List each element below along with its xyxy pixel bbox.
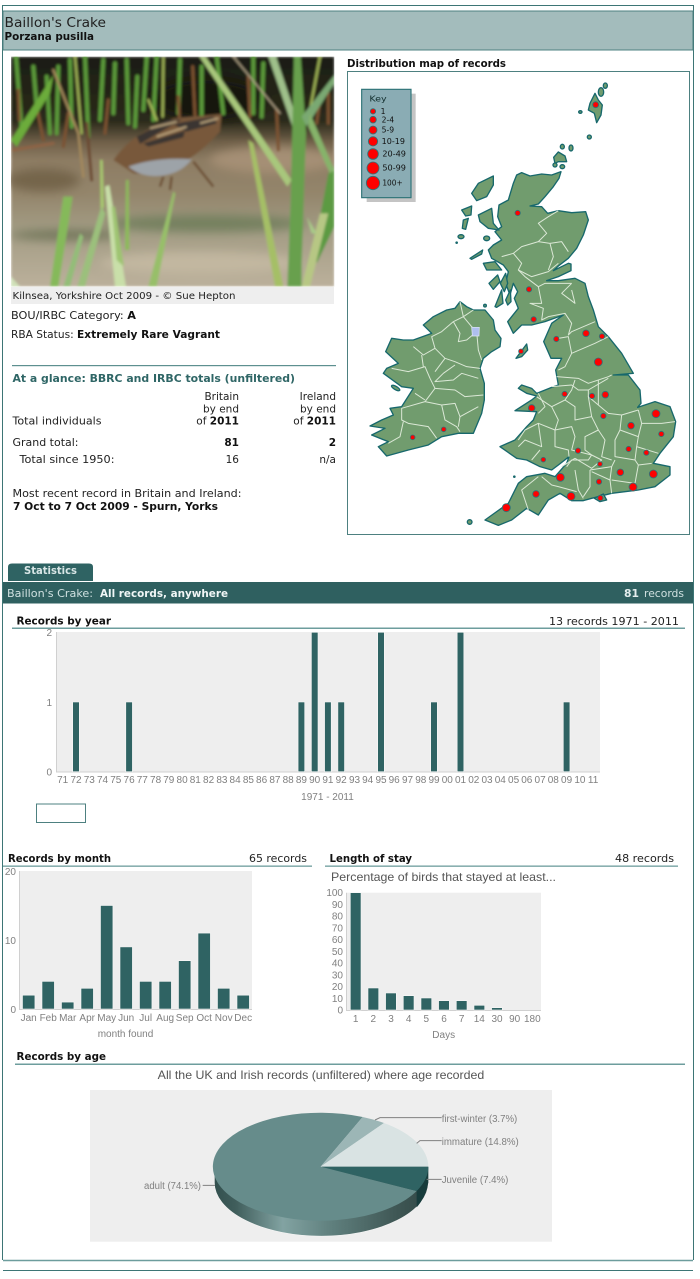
bar chart: records by year: 02	[468, 775, 480, 786]
bar chart: records by year: 08	[548, 775, 559, 786]
bar chart: records by month: Feb	[40, 1013, 57, 1024]
species name: Baillon's Crake	[4, 16, 106, 31]
map key: 50-99	[382, 164, 406, 173]
photo caption: Kilnsea, Yorkshire Oct 2009 - © Sue Hepton	[12, 291, 236, 302]
chart heading: length of stay: Length of stay	[330, 853, 412, 865]
bar chart: records by month: Apr	[79, 1013, 96, 1024]
chart heading: records by year: Records by year	[16, 616, 112, 628]
bar chart: records by year: 96	[389, 775, 400, 786]
bar chart: records by year: 95	[375, 775, 387, 786]
bar chart: length of stay: 14	[474, 1014, 485, 1025]
most recent record: 7 Oct to 7 Oct 2009 - Spurn, Yorks	[13, 501, 218, 513]
column head: Britain: of 2011	[196, 416, 239, 428]
header band	[3, 11, 693, 50]
bar chart: records by year	[46, 628, 600, 803]
chart heading: records by year: 13 records 1971 - 2011	[549, 616, 679, 628]
bar chart: records by year: 85	[243, 775, 254, 786]
bar chart: length of stay: 30	[332, 970, 343, 981]
bar chart: records by year: 97	[402, 775, 413, 786]
bar chart: records by year: 99	[428, 775, 440, 786]
back reeds	[13, 57, 328, 180]
bar chart: length of stay: 180	[524, 1014, 541, 1025]
row: grand total: 2	[329, 437, 336, 449]
column head: Britain: by end	[203, 403, 239, 415]
chart subtitle: percentage: Percentage of birds that stayed at least...	[331, 870, 556, 884]
row label: total individuals: Total individuals	[11, 416, 102, 428]
bar chart: length of stay: 40	[332, 959, 343, 970]
chart subtitle: age records: All the UK and Irish records (unfiltered) where age recorded	[158, 1068, 484, 1082]
bar chart: records by year: 09	[561, 775, 573, 786]
bar chart: records by month: Nov	[215, 1013, 233, 1024]
pie chart: records by age	[90, 1090, 552, 1242]
bar chart: records by year: 78	[150, 775, 162, 786]
bar chart: length of stay: 30	[491, 1014, 503, 1025]
statistics tab: Statistics	[24, 565, 77, 577]
bar chart: records by year: 11	[588, 775, 599, 786]
row: grand total	[12, 437, 336, 449]
chart heading: records by month: 65 records	[249, 853, 307, 865]
statistics title bar: records	[644, 588, 684, 600]
bar chart: length of stay: 70	[332, 923, 343, 934]
bar chart: records by year: 82	[203, 775, 215, 786]
bar chart: length of stay: 10	[332, 994, 343, 1005]
bar chart: length of stay	[326, 888, 541, 1041]
bar chart: length of stay: 60	[332, 935, 343, 946]
bar chart: length of stay: 50	[332, 947, 343, 958]
statistics title bar: 81	[624, 588, 639, 600]
chart heading: records by year	[12, 616, 685, 629]
bar chart: records by year: 91	[322, 775, 334, 786]
bar chart: records by year: 10	[574, 775, 586, 786]
Lough Neagh	[472, 327, 479, 336]
county boundaries: Britain	[502, 211, 675, 510]
pie labels	[144, 1114, 519, 1192]
front leaves	[11, 57, 334, 287]
panel: at a glance totals	[11, 365, 336, 513]
row: total since 1950	[18, 454, 336, 466]
pie side wall	[214, 1167, 428, 1236]
bar chart: records by month: Sep	[176, 1013, 194, 1024]
bar chart: records by year: 79	[163, 775, 175, 786]
bar chart: records by year: 73	[84, 775, 95, 786]
bar chart: records by year: 93	[349, 775, 360, 786]
at a glance heading: At a glance: BBRC and IRBC totals (unfiltered)	[12, 372, 295, 385]
bar chart: length of stay: 0	[337, 1006, 343, 1016]
chart heading: length of stay	[325, 853, 678, 867]
chart heading: records by month: Records by month	[8, 853, 111, 865]
bar chart: records by year: 84	[230, 775, 241, 786]
bar chart: records by year: 03	[481, 775, 493, 786]
statistics title bar	[3, 582, 693, 604]
leader lines	[203, 1118, 442, 1185]
bar chart: records by year: 90	[309, 775, 321, 786]
map heading: Distribution map of records	[347, 58, 506, 70]
bar chart: records by month: Dec	[234, 1013, 252, 1024]
map key: 100+	[382, 179, 403, 188]
RBA status: RBA Status: Extremely Rare Vagrant	[11, 329, 220, 341]
bar chart: records by month: 10	[5, 936, 16, 947]
map: Ireland	[370, 302, 501, 456]
map key: Key	[369, 94, 387, 104]
column head: Ireland: by end	[300, 403, 336, 415]
bar chart: records by month: 0	[10, 1005, 16, 1016]
map key: 20-49	[382, 150, 406, 159]
bar chart: records by year: 92	[336, 775, 347, 786]
bar chart: length of stay: 1	[353, 1014, 359, 1025]
record dots	[410, 102, 664, 512]
column head: Ireland: of 2011	[293, 416, 336, 428]
bar chart: records by year: 74	[97, 775, 108, 786]
bar chart: records by year: 00	[442, 775, 453, 786]
row: grand total: 81	[224, 437, 239, 449]
row: grand total: Grand total:	[12, 437, 78, 449]
most recent record: Most recent record in Britain and Ireland:	[12, 488, 242, 500]
bird	[113, 114, 222, 190]
map key: 10-19	[382, 137, 405, 146]
bar chart: records by year: 80	[177, 775, 188, 786]
bar chart: records by year: 1	[46, 698, 52, 709]
statistics tab	[8, 564, 93, 581]
bar chart: length of stay: 5	[424, 1014, 430, 1025]
statistics title bar: Baillon's Crake:	[7, 588, 93, 600]
bar chart: records by year: 81	[190, 775, 201, 786]
bar chart: length of stay: 100	[326, 888, 343, 899]
bar chart: records by year: 87	[269, 775, 281, 786]
bar chart: records by month: Jan	[21, 1013, 37, 1024]
slice: first-winter	[321, 1117, 384, 1167]
bar chart: records by year: 88	[283, 775, 294, 786]
map key: 5-9	[382, 126, 394, 135]
most recent record	[12, 488, 242, 513]
bar chart: records by year: 05	[508, 775, 520, 786]
bar chart: length of stay: 7	[459, 1014, 465, 1025]
bar chart: length of stay: 90	[332, 900, 343, 911]
bar chart: records by year: 07	[535, 775, 546, 786]
Scottish and English islands	[456, 83, 607, 524]
empty selector box	[36, 804, 86, 822]
scientific name: Porzana pusilla	[4, 31, 94, 43]
bar chart: records by year: 06	[521, 775, 533, 786]
bar chart: records by year: 72	[70, 775, 82, 786]
bar chart: records by year: 71	[57, 775, 69, 786]
bar chart: records by month: Jul	[139, 1013, 152, 1024]
bar chart: length of stay: 90	[509, 1014, 521, 1025]
bar chart: length of stay: 3	[388, 1014, 394, 1025]
bar chart: records by year: 04	[495, 775, 506, 786]
map key: 2-4	[382, 115, 394, 124]
chart heading: records by month	[3, 853, 312, 867]
panel: distribution map	[348, 72, 690, 534]
bar chart: records by year: 01	[455, 775, 466, 786]
bar chart: records by year: 77	[137, 775, 148, 786]
column head: Ireland: Ireland	[300, 391, 336, 403]
pie labels: immature (14.8%)	[442, 1137, 519, 1148]
bar chart: records by year: 1971 - 2011	[301, 792, 354, 803]
bar chart: length of stay: Days	[432, 1030, 455, 1041]
statistics title bar: All records, anywhere	[100, 588, 228, 600]
bar chart: records by month: month found	[98, 1029, 153, 1040]
bar chart: records by year: 86	[256, 775, 268, 786]
bar chart: records by year: 76	[124, 775, 135, 786]
bar chart: records by month: 20	[5, 867, 16, 878]
bar chart: records by year: 94	[362, 775, 374, 786]
bar chart: length of stay: 4	[406, 1014, 412, 1025]
bar chart: records by year: 89	[296, 775, 307, 786]
bar chart: records by month: Aug	[156, 1013, 174, 1024]
map key	[362, 89, 416, 202]
bar chart: records by year: 0	[46, 768, 52, 778]
chart heading: records by age: Records by age	[16, 1051, 106, 1063]
pie labels: first-winter (3.7%)	[442, 1114, 517, 1125]
bar chart: length of stay: 20	[332, 982, 343, 993]
slice: Juvenile	[321, 1167, 428, 1191]
BOU category: BOU/IRBC Category: A	[11, 310, 137, 322]
slice: immature	[321, 1123, 428, 1167]
bar chart: records by month: Oct	[196, 1013, 212, 1024]
bar chart: records by month: Jun	[118, 1013, 134, 1024]
bar chart: records by year: 83	[216, 775, 228, 786]
map key: 1	[381, 107, 386, 116]
slice: adult	[213, 1113, 417, 1221]
chart heading: length of stay: 48 records	[615, 853, 674, 865]
bar chart: records by year: 98	[415, 775, 427, 786]
bar chart: records by month: Mar	[59, 1013, 77, 1024]
row: total since 1950: 16	[226, 454, 239, 466]
bar chart: records by month	[5, 867, 252, 1040]
column head: Britain: Britain	[204, 391, 239, 403]
county boundaries: Ireland	[388, 302, 483, 443]
map: Great Britain	[456, 83, 676, 525]
pie labels: adult (74.1%)	[144, 1181, 201, 1192]
bar chart: records by year: 75	[110, 775, 122, 786]
bar chart: length of stay: 6	[441, 1014, 447, 1025]
row: total since 1950: Total since 1950:	[18, 454, 114, 466]
photo caption	[11, 287, 334, 304]
pie labels: Juvenile (7.4%)	[442, 1175, 508, 1186]
bar chart: length of stay: 2	[371, 1014, 377, 1025]
photo: bird among reeds	[7, 57, 337, 287]
bar chart: records by year: 2	[46, 628, 52, 639]
bar chart: records by month: May	[97, 1013, 116, 1024]
row: total since 1950: n/a	[319, 454, 336, 466]
bar chart: length of stay: 80	[332, 912, 343, 923]
